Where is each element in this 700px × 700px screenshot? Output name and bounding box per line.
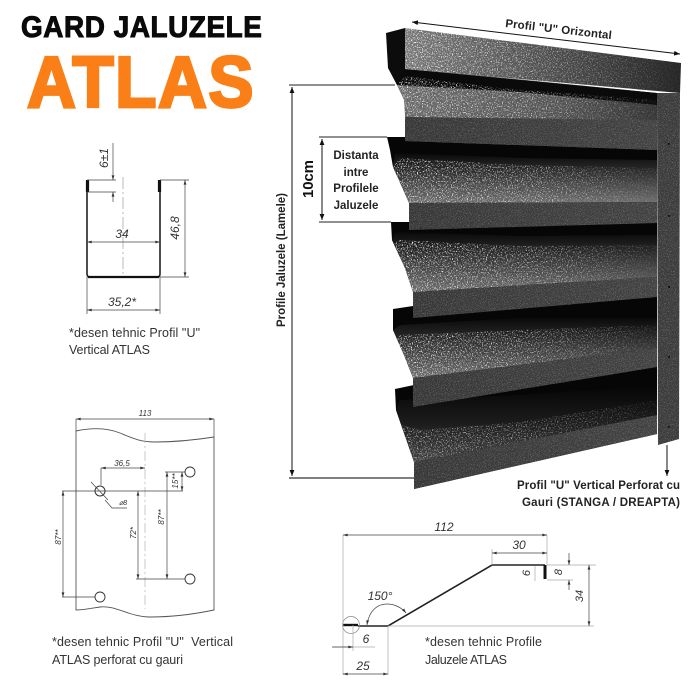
drawing: U profile cross-section: 46,8 (168, 216, 182, 240)
caption: U profile: Vertical ATLAS (69, 343, 150, 357)
caption: perforated profile (52, 635, 233, 667)
drawing: U profile cross-section: 34 (115, 227, 129, 241)
drawing: louvre profile section: 30 (512, 538, 526, 552)
drawing: U profile cross-section: 6±1 (97, 148, 111, 168)
drawing: perforated U profile: 87** (157, 509, 166, 525)
fine texture on front faces (400, 90, 685, 495)
drawing: perforated U profile: 15** (171, 473, 180, 489)
caption: U profile (69, 326, 200, 357)
drawing: perforated U profile: 36,5 (114, 459, 130, 468)
drawing: perforated U profile: 113 (139, 409, 152, 418)
label: Profil U Orizontal (412, 18, 680, 54)
drawing: louvre profile section (332, 520, 596, 675)
photo: louvre fence panel (386, 25, 685, 495)
dimension: 10cm distance between profiles: 10cm (300, 160, 317, 198)
drawing: perforated U profile (54, 409, 214, 617)
caption: perforated profile: *desen tehnic Profil "U" Vertical (52, 635, 233, 649)
dimension: Profile Jaluzele (Lamele): Profile Jaluzele (Lamele) (276, 193, 288, 327)
drawing: louvre profile section: 34 (574, 590, 586, 602)
label: Profil U Vertical Perforat: Profil "U" Vertical Perforat cu (517, 480, 680, 492)
drawing: louvre profile section: 150° (368, 589, 393, 603)
label: Profil U Vertical Perforat (517, 445, 680, 509)
drawing: louvre profile section: 112 (434, 520, 454, 534)
title: ATLAS: ATLAS (27, 42, 254, 122)
label: Profil U Orizontal: Profil "U" Orizontal (505, 18, 612, 42)
drawing: perforated U profile: 72* (129, 526, 138, 539)
drawing: U profile cross-section (87, 143, 189, 314)
drawing: louvre profile section: 6 (521, 569, 533, 576)
slat 4 (390, 290, 660, 407)
caption: louvre profile (425, 635, 542, 667)
dimension: 10cm distance between profiles: Jaluzele (334, 200, 378, 212)
slat 1 (390, 68, 660, 150)
caption: U profile: *desen tehnic Profil "U" (69, 326, 200, 340)
dimension: 10cm distance between profiles: Profilele (333, 183, 379, 195)
dimension: 10cm distance between profiles (300, 137, 391, 222)
drawing: perforated U profile: ⌀8 (119, 500, 127, 507)
caption: louvre profile: *desen tehnic Profile (425, 635, 542, 649)
vertical perforated U profile (657, 93, 680, 445)
drawing: louvre profile section: 6 (363, 632, 370, 646)
slat 5 (bottom) (390, 360, 660, 489)
label: Profil U Vertical Perforat: Gauri (STANGA / DREAPTA) (522, 497, 680, 509)
drawing: U profile cross-section: 35,2* (108, 295, 136, 309)
caption: perforated profile: ATLAS perforat cu gauri (52, 653, 183, 667)
title: GARD JALUZELE: GARD JALUZELE (21, 11, 262, 44)
top U profile (386, 25, 681, 95)
drawing: perforated U profile: 87** (54, 529, 63, 545)
dimension: 10cm distance between profiles: Distanta (333, 150, 379, 162)
drawing: louvre profile section: 25 (355, 659, 370, 673)
slat 3 (390, 222, 660, 318)
caption: louvre profile: Jaluzele ATLAS (425, 653, 507, 667)
dimension: 10cm distance between profiles: intre (344, 167, 368, 179)
drawing: louvre profile section: 8 (553, 568, 565, 575)
slat 2 (387, 137, 660, 230)
